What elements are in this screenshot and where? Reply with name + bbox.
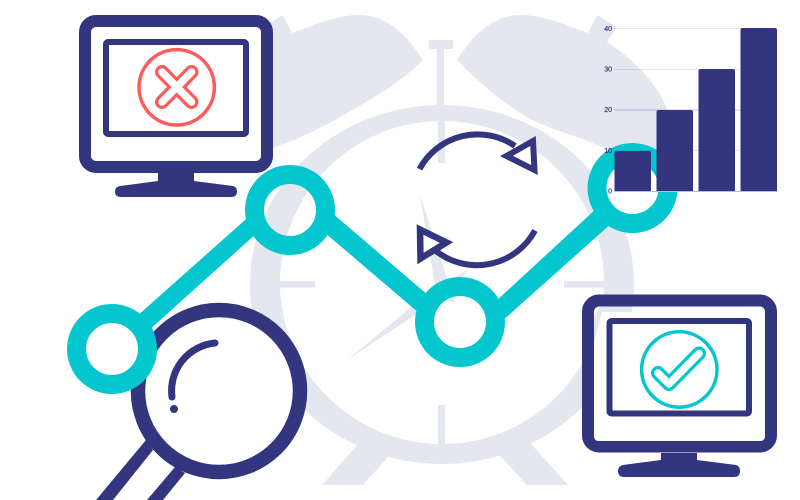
clock bell: right: [457, 15, 672, 155]
lens: [138, 310, 300, 472]
monitor stand: [618, 453, 740, 477]
chart axis labels: 0: [608, 188, 612, 196]
lower arc arrow: [420, 230, 535, 265]
trend segments: [136, 208, 613, 331]
monitor screen: [106, 42, 246, 134]
upper arc arrow: [420, 134, 534, 170]
clock hands: [347, 195, 470, 360]
cross symbol: [162, 72, 192, 102]
chart gridlines: [614, 28, 777, 150]
chart baseline: [614, 190, 777, 192]
chart axis labels: 30: [604, 66, 612, 74]
handle: [96, 440, 185, 500]
icon: monitor with check mark: [588, 300, 771, 477]
clock legs: [322, 435, 568, 485]
clock top pin: [429, 40, 453, 107]
chart axis labels: 10: [604, 148, 612, 155]
monitor screen: [610, 321, 749, 414]
trend nodes: [76, 152, 668, 384]
monitor frame: [85, 21, 267, 167]
lens highlight dot: [170, 405, 178, 413]
clock bell: left: [208, 15, 423, 155]
monitor stand: [115, 173, 237, 197]
clock remnant inside bezel: [594, 307, 603, 345]
check symbol: [658, 354, 699, 384]
icon: magnifying glass: [96, 310, 300, 500]
clock hour ticks: [279, 120, 605, 445]
icon: cycle arrows: [420, 134, 535, 265]
icon: background alarm clock: [208, 15, 672, 485]
lens highlight: [172, 343, 215, 397]
cross badge circle: [139, 50, 214, 125]
check badge circle: [642, 332, 717, 407]
chart axis labels: 20: [604, 107, 612, 114]
chart bars: [614, 28, 777, 191]
monitor inner backing: [594, 312, 765, 441]
trend line chart: [76, 152, 668, 384]
monitor frame: [588, 300, 771, 446]
bar chart: [604, 26, 777, 196]
icon: monitor with cross: [85, 21, 267, 197]
clock ring: [250, 105, 634, 464]
chart axis labels: [604, 26, 612, 196]
chart axis labels: 40: [604, 26, 612, 33]
